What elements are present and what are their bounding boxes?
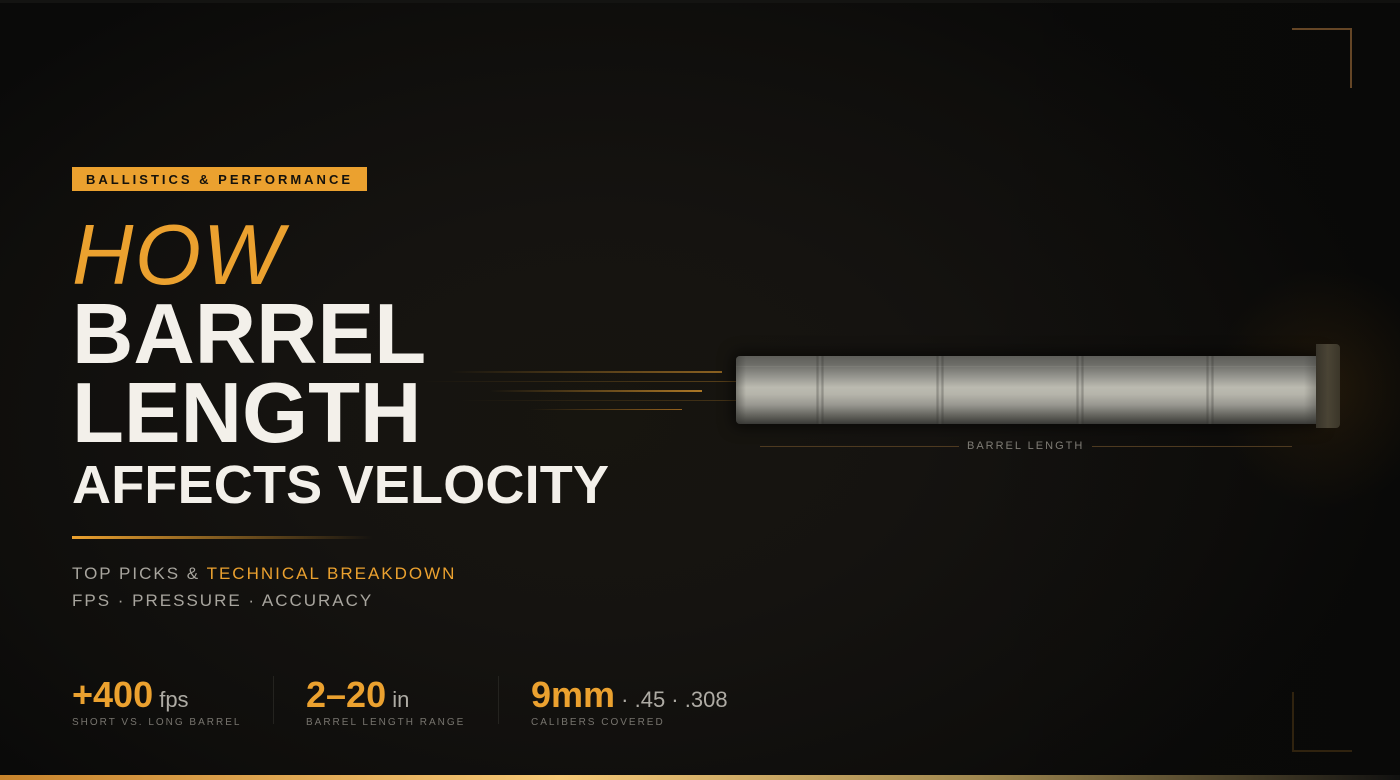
- tag: ballistics and performance: [72, 167, 367, 191]
- stat divider: [273, 676, 274, 724]
- corner bracket: top right: [1292, 28, 1352, 88]
- stat: velocity gain: [72, 674, 241, 728]
- speed lines: [460, 371, 736, 410]
- title line: affects velocity: AFFECTS VELOCITY: [72, 455, 609, 515]
- tag: ballistics and performance: BALLISTICS & PERFORMANCE: [86, 172, 353, 187]
- subtitle: [72, 564, 456, 610]
- barrel length label: BARREL LENGTH: [967, 440, 1084, 452]
- stat: calibers: CALIBERS COVERED: [531, 717, 665, 728]
- stat: velocity gain: SHORT VS. LONG BARREL: [72, 717, 241, 728]
- stat: barrel range: BARREL LENGTH RANGE: [306, 717, 465, 728]
- subtitle: TOP PICKS & TECHNICAL BREAKDOWN: [72, 564, 456, 583]
- title line: barrel: BARREL: [72, 287, 426, 382]
- stat: calibers: 9mm · .45 · .308: [531, 674, 728, 715]
- barrel: [726, 344, 1340, 428]
- barrel rings: [816, 356, 824, 424]
- stat divider: [498, 676, 499, 724]
- title: [72, 208, 609, 515]
- top edge strip: [0, 0, 1400, 3]
- title line: how: HOW: [72, 208, 284, 303]
- muzzle cap: [1316, 344, 1340, 428]
- accent rule: [72, 536, 372, 539]
- corner bracket: bottom left of right side: [1292, 692, 1352, 752]
- subtitle: FPS · PRESSURE · ACCURACY: [72, 590, 373, 610]
- title line: length: LENGTH: [72, 366, 421, 461]
- bottom accent bar: [0, 775, 1400, 780]
- stat: velocity gain: +400 fps: [72, 674, 189, 715]
- barrel tube: [736, 356, 1316, 424]
- right darkening: [950, 0, 1400, 780]
- stat: barrel range: [306, 674, 465, 728]
- muzzle glow: [1180, 270, 1400, 510]
- stat: barrel range: 2–20 in: [306, 674, 409, 715]
